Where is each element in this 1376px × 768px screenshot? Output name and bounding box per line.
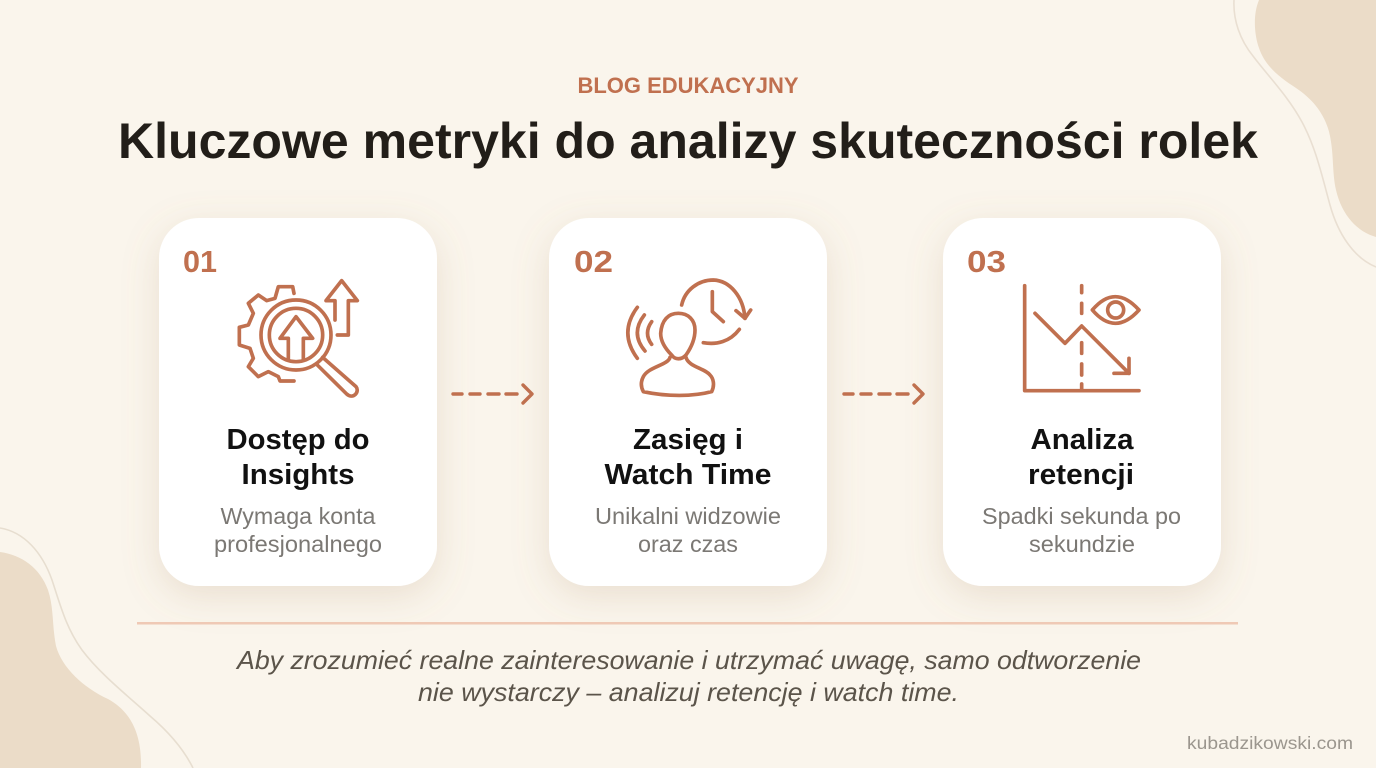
- number 03: 03: [967, 244, 1006, 279]
- closing note: [235, 645, 1141, 707]
- blob: top right: [1255, 0, 1376, 237]
- icon: gear magnifier with arrows: [239, 281, 357, 396]
- closing note: Aby zrozumieć realne zainteresowanie i utrzymać uwagę, samo odtworzenie: [235, 645, 1141, 675]
- curve: bottom left: [0, 528, 193, 768]
- arrow: 1 to 2: [453, 385, 532, 403]
- description: [595, 503, 781, 557]
- heading: Dostęp do: [226, 424, 370, 456]
- description: [214, 503, 382, 557]
- curve: top right: [1234, 0, 1376, 267]
- heading: Watch Time: [604, 459, 772, 491]
- panel: card 3: [943, 218, 1221, 586]
- heading: [1028, 424, 1134, 491]
- watermark: kubadzikowski.com: [1187, 733, 1353, 753]
- description: Spadki sekunda po: [982, 503, 1181, 529]
- number 02: 02: [574, 244, 613, 279]
- heading: Insights: [242, 459, 354, 491]
- description: sekundzie: [1029, 531, 1135, 557]
- closing note: nie wystarczy – analizuj retencję i watch time.: [418, 677, 959, 707]
- heading: [604, 424, 772, 491]
- icon: falling chart with eye: [1025, 286, 1139, 391]
- heading: [226, 424, 370, 491]
- description: Unikalni widzowie: [595, 503, 781, 529]
- panel: card 2: [549, 218, 827, 586]
- number 01: 01: [183, 244, 217, 279]
- blob: bottom left: [0, 552, 141, 768]
- description: [982, 503, 1181, 557]
- arrow: 2 to 3: [844, 385, 923, 403]
- heading: Analiza: [1030, 424, 1134, 456]
- description: Wymaga konta: [220, 503, 376, 529]
- panel: card 1: [159, 218, 437, 586]
- description: oraz czas: [638, 531, 738, 557]
- heading: Zasięg i: [633, 424, 743, 456]
- eyebrow: BLOG EDUKACYJNY: [578, 73, 799, 98]
- description: profesjonalnego: [214, 531, 382, 557]
- heading: retencji: [1028, 459, 1134, 491]
- divider: [137, 622, 1238, 624]
- icon: listener and clock: [628, 280, 751, 395]
- title: Kluczowe metryki do analizy skuteczności rolek: [118, 113, 1258, 169]
